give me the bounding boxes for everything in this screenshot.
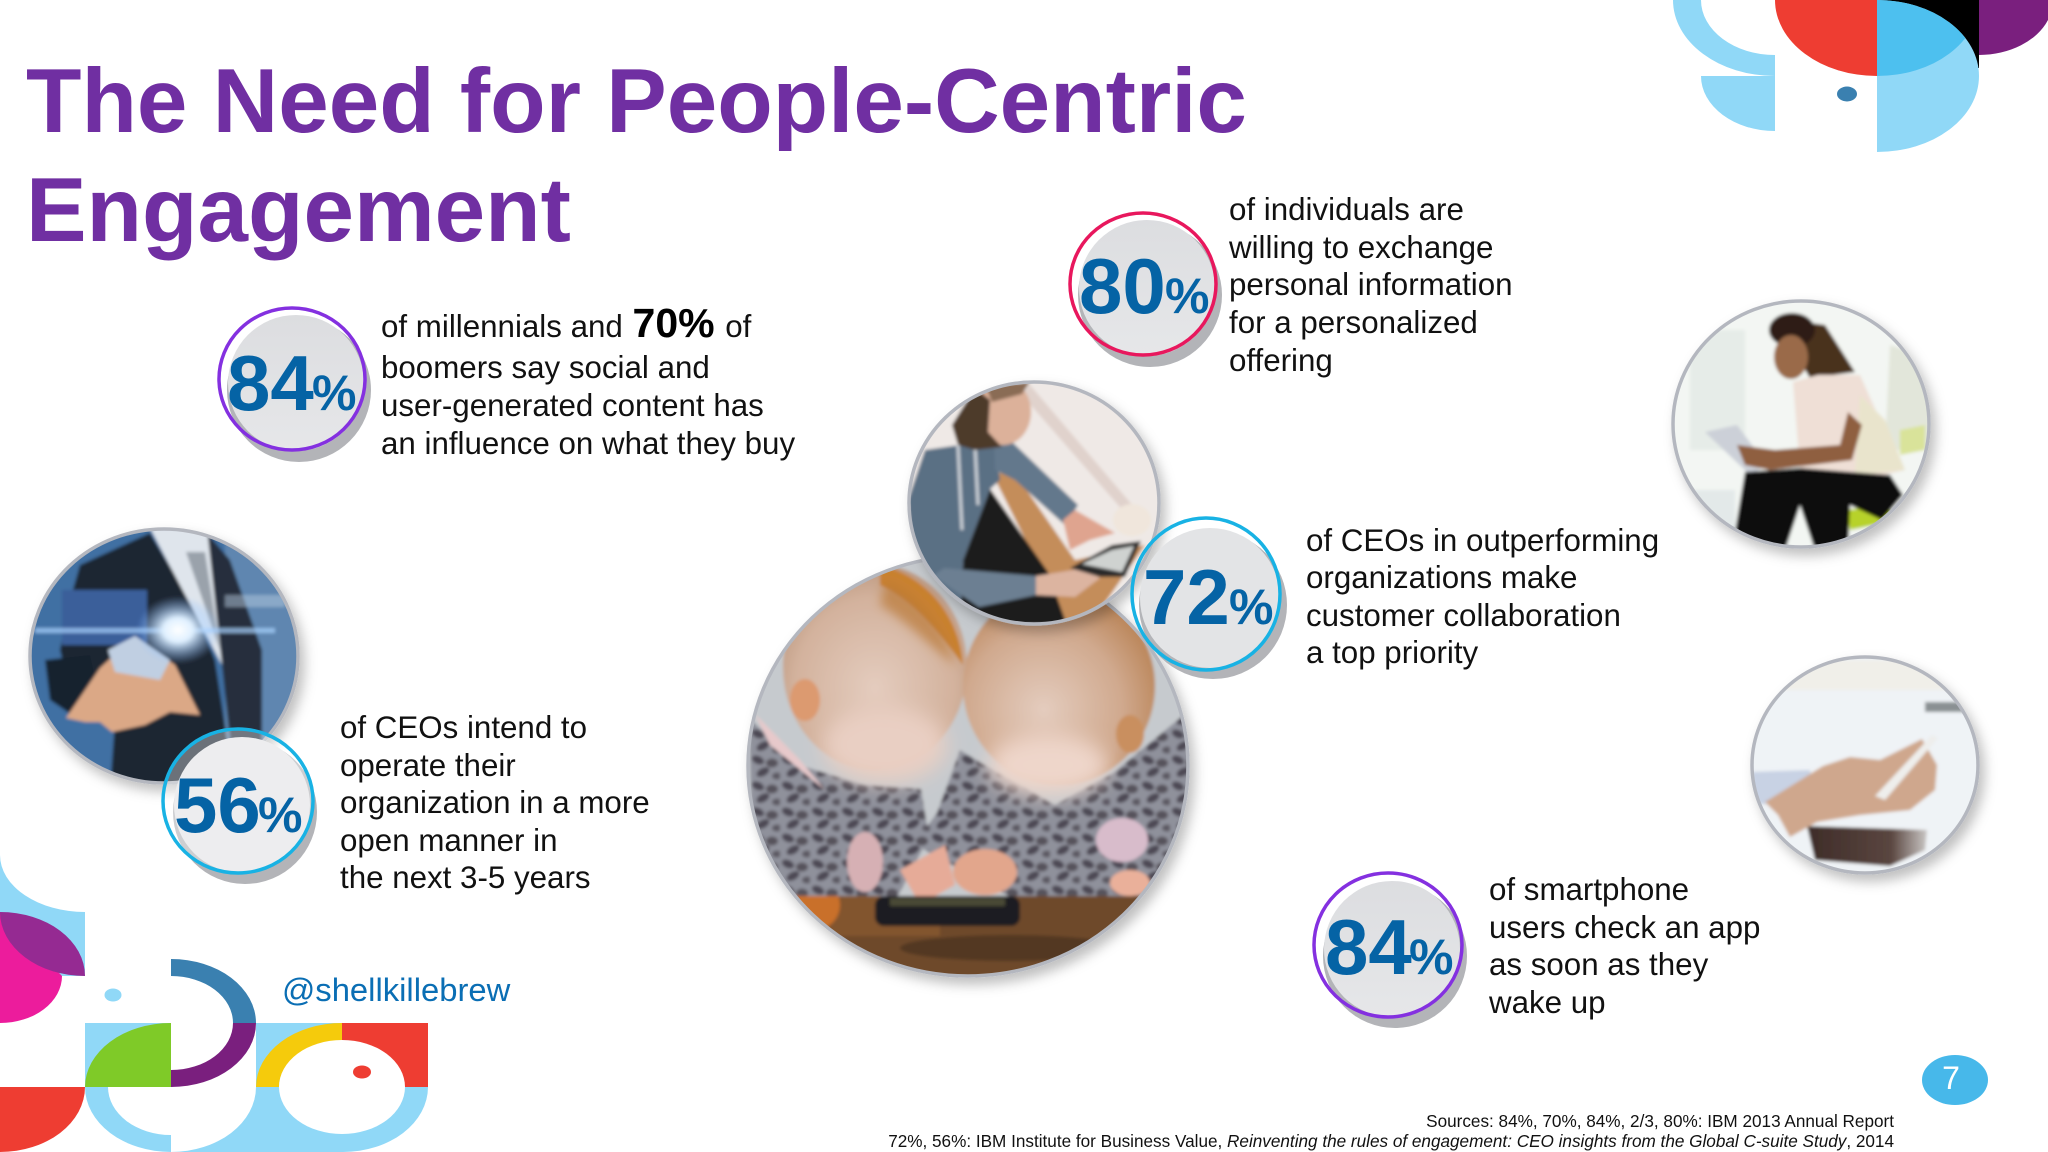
text: 72% CEOs: a top priority [1306, 635, 1479, 670]
text: 84% millennials: of millennials and 70% of [381, 300, 751, 346]
photo: businessman touching screen [25, 520, 305, 790]
text: 84% millennials: boomers say social and [381, 350, 710, 385]
text: 56% CEOs: open manner in [340, 823, 558, 858]
stat badge: 80% individuals: 80 [1079, 242, 1166, 330]
title: Engagement [26, 160, 571, 261]
stat badge: 72% CEOs: 72 [1143, 553, 1230, 641]
text: 80% individuals: of individuals are [1229, 192, 1464, 227]
text: 80% individuals: for a personalized [1229, 305, 1478, 340]
text: 72% CEOs: organizations make [1306, 560, 1577, 595]
sources footnote [888, 1111, 1894, 1151]
stat badge: 56% CEOs: % [258, 787, 302, 843]
page number: 7 [1942, 1060, 1960, 1096]
logo mark: bottom left [0, 855, 428, 1152]
text: 56% CEOs: the next 3-5 years [340, 860, 591, 895]
stat badge: 84% smartphone users: 84 [1325, 903, 1412, 991]
twitter handle: @shellkillebrew [282, 971, 511, 1008]
text: 84% millennials: an influence on what they buy [381, 426, 795, 461]
stat badge: 84% millennials: % [312, 365, 356, 421]
text: 56% CEOs: organization in a more [340, 785, 650, 820]
text: 84% millennials: user-generated content has [381, 388, 764, 423]
photo: man with tablet [900, 375, 1170, 635]
text: 80% individuals: willing to exchange [1228, 230, 1493, 265]
text: 84% smartphone users: wake up [1488, 985, 1606, 1020]
text: 80% individuals: personal information [1229, 267, 1513, 302]
stat badge: 80% individuals: % [1165, 268, 1209, 324]
sources footnote: 72%, 56%: IBM Institute for Business Value, Reinventing the rules of engagement: CEO insights from the Global C-suite Study, 2014 [888, 1131, 1894, 1151]
text: 80% individuals: offering [1229, 343, 1333, 378]
text: 84% smartphone users: of smartphone [1489, 872, 1689, 907]
stat badge: 84% millennials: 84 [227, 339, 314, 427]
photo: hands holding smartphone [1745, 650, 1985, 880]
stat badge: 56% CEOs [163, 729, 317, 884]
text: 72% CEOs: of CEOs in outperforming [1306, 523, 1659, 558]
title [26, 51, 1247, 261]
text: 56% CEOs: operate their [340, 748, 516, 783]
stat badge: 72% CEOs: % [1229, 579, 1273, 635]
stat badge: 84% smartphone users [1314, 873, 1467, 1028]
photo: babies with phone [740, 550, 1200, 990]
stat badge: 80% individuals [1070, 213, 1222, 367]
stat badge: 56% CEOs: 56 [174, 761, 261, 849]
sources footnote: Sources: 84%, 70%, 84%, 2/3, 80%: IBM 2013 Annual Report [1426, 1111, 1894, 1131]
text: 72% CEOs: customer collaboration [1306, 598, 1621, 633]
stat badge: 72% CEOs [1132, 518, 1287, 679]
text: 84% smartphone users: as soon as they [1489, 947, 1709, 982]
stat badge: 84% millennials [219, 308, 371, 462]
photo: woman reading tablet [1665, 295, 1940, 555]
title: The Need for People-Centric [26, 51, 1247, 152]
stat badge: 84% smartphone users: % [1409, 929, 1453, 985]
text: 84% smartphone users: users check an app [1489, 910, 1760, 945]
logo mark: top right [1673, 0, 2048, 152]
page number [1922, 1055, 1988, 1105]
text: 56% CEOs: of CEOs intend to [340, 710, 587, 745]
